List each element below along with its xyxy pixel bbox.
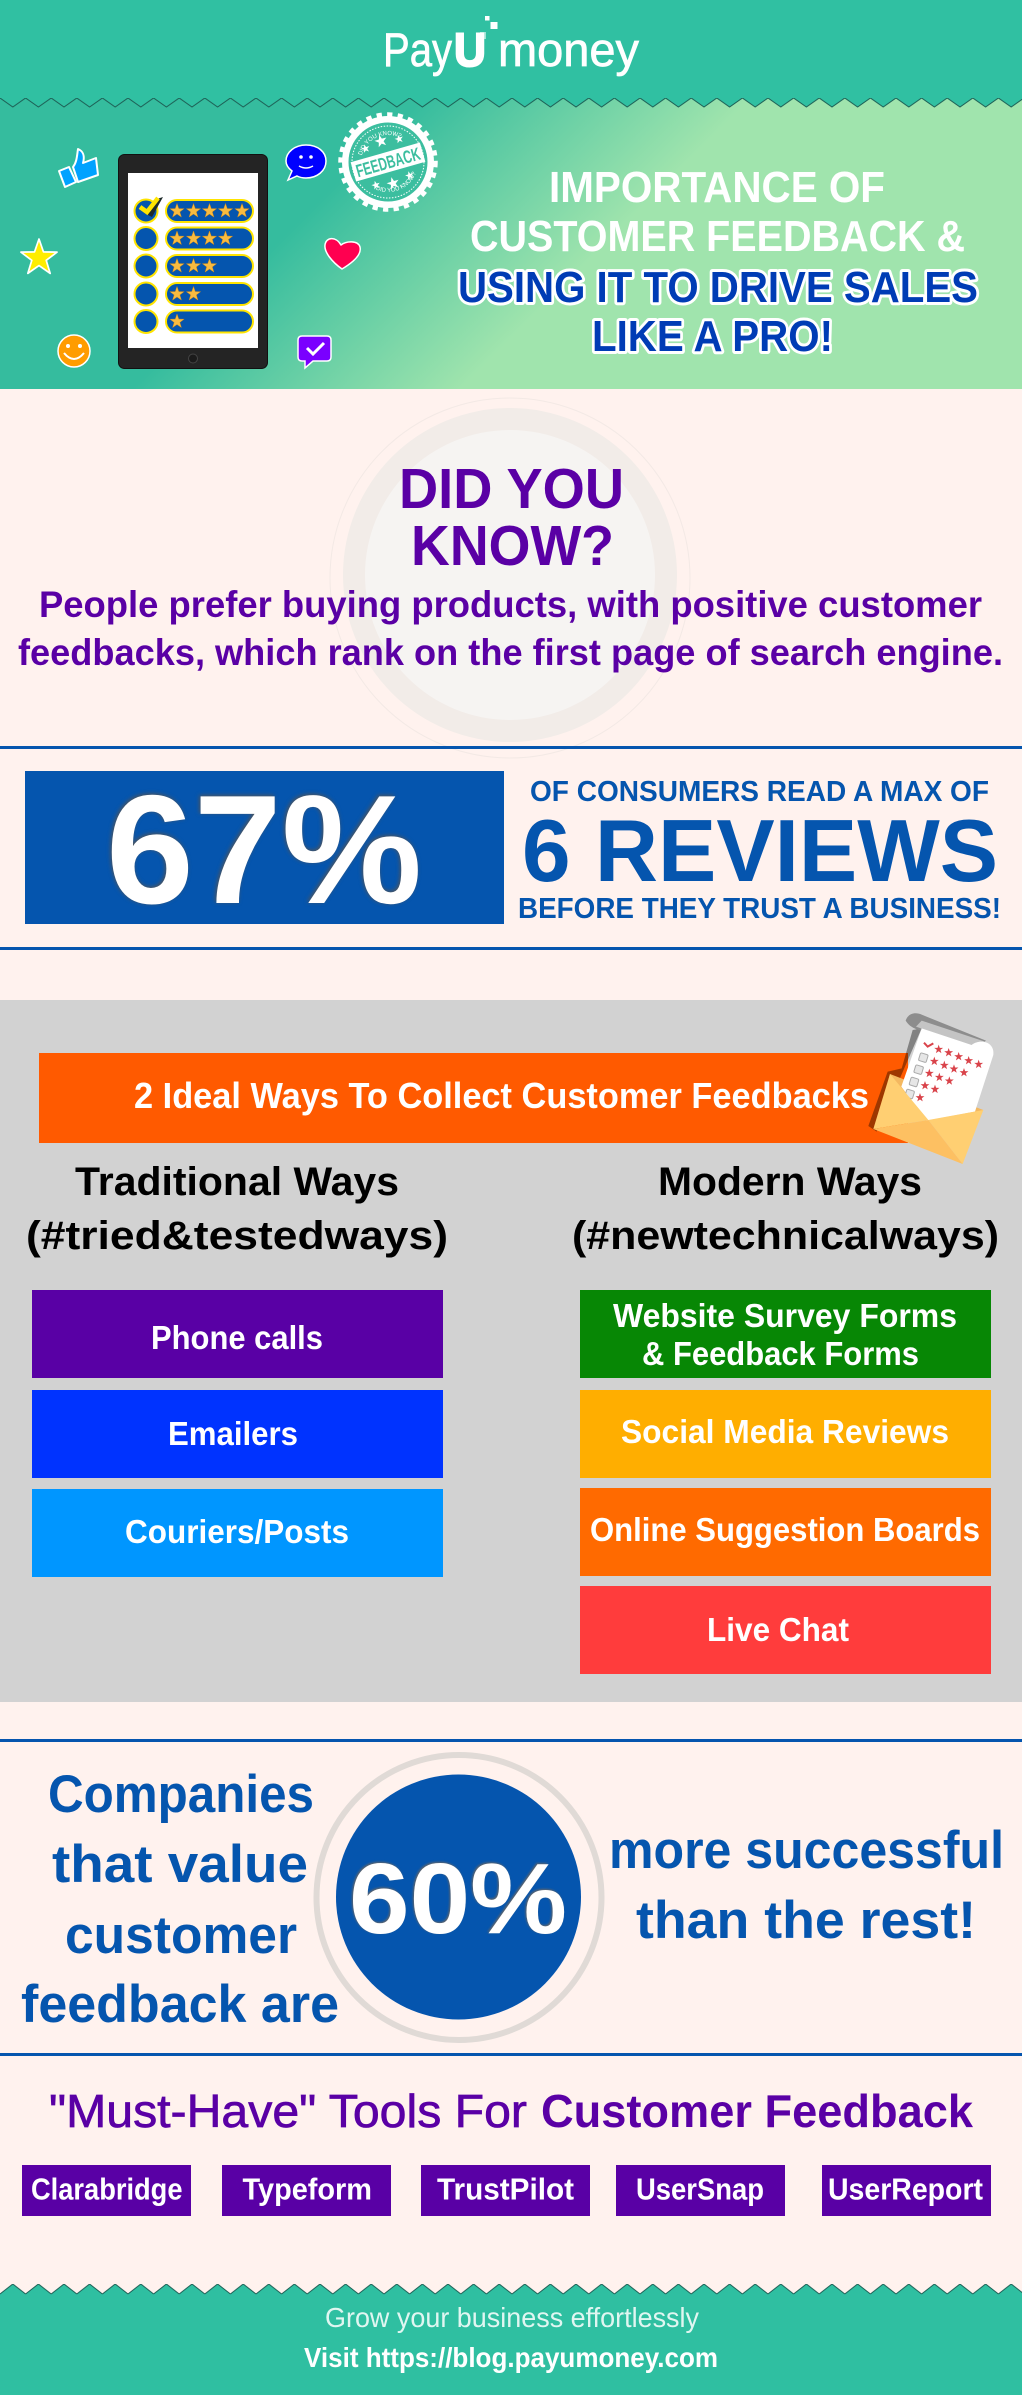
- footer: [0, 2284, 1022, 2395]
- icon: purple check bubble: [298, 336, 331, 368]
- item: phone calls: Phone calls: [151, 1319, 323, 1356]
- tool tag: trustpilot: TrustPilot: [437, 2172, 574, 2206]
- panel: did you know: [18, 398, 1003, 758]
- panel: 67 percent stat: OF CONSUMERS READ A MAX OF: [530, 776, 989, 808]
- item: emailers: [32, 1390, 443, 1478]
- icon: red heart: [325, 239, 360, 269]
- logo: PayU money: [383, 16, 639, 76]
- panel: 67 percent stat: BEFORE THEY TRUST A BUSINESS!: [518, 893, 1001, 925]
- title: CUSTOMER FEEDBACK &: [470, 212, 965, 261]
- heading: did you know: [399, 457, 624, 578]
- heading: must-have tools: "Must-Have" Tools For: [49, 2085, 527, 2137]
- tool tag: clarabridge: [22, 2165, 191, 2216]
- text: right statement: more successful: [609, 1821, 1004, 1880]
- item: website survey forms: & Feedback Forms: [642, 1335, 919, 1372]
- panel: 67 percent stat: [25, 763, 1001, 936]
- tool tag: usersnap: [616, 2165, 785, 2216]
- chart: 60 percent circle: [316, 1755, 602, 2040]
- item: emailers: Emailers: [168, 1415, 298, 1452]
- logo: PayU money: money: [498, 23, 639, 76]
- title: [458, 163, 978, 361]
- text: did you know body: People prefer buying products, with positive customer: [39, 584, 982, 625]
- text: footer url: Visit https://blog.payumoney.com: [304, 2342, 718, 2373]
- heading: must-have tools: Customer Feedback: [541, 2085, 973, 2137]
- heading: did you know: DID YOU: [399, 457, 624, 521]
- tool tag: usersnap: UserSnap: [636, 2172, 764, 2206]
- icon: feedback stamp: DID YOU KNOW?: [358, 130, 402, 155]
- hero banner: [0, 98, 1022, 389]
- item: online suggestion boards: Online Suggestion Boards: [590, 1511, 980, 1548]
- text: left statement: Companies: [48, 1765, 314, 1824]
- tool tag: userreport: UserReport: [828, 2172, 983, 2206]
- icon: thumbs up: [59, 149, 98, 187]
- item: live chat: [580, 1586, 991, 1674]
- heading: did you know: KNOW?: [411, 514, 614, 578]
- column: traditional ways: [26, 1160, 448, 1577]
- item: social media reviews: [580, 1390, 991, 1478]
- text: left statement: feedback are: [21, 1975, 339, 2034]
- panel: 67 percent stat: 6 REVIEWS: [522, 801, 998, 900]
- item: social media reviews: Social Media Reviews: [621, 1413, 949, 1450]
- column: modern ways: [572, 1160, 999, 1674]
- icon: feedback stamp: DID YOU KNOW?: [376, 172, 416, 192]
- title: USING IT TO DRIVE SALES: [458, 263, 978, 312]
- tool tag: typeform: Typeform: [242, 2172, 372, 2206]
- icon: yellow star: [21, 239, 57, 273]
- heading: modern ways: [572, 1160, 999, 1258]
- icon: orange smiley: [58, 335, 90, 367]
- item: online suggestion boards: [580, 1488, 991, 1576]
- heading banner: [39, 1053, 908, 1143]
- text: did you know body: feedbacks, which rank on the first page of search engine.: [18, 632, 1003, 673]
- logo: PayU money: U: [454, 23, 486, 76]
- heading: traditional ways: (#tried&testedways): [26, 1214, 448, 1258]
- item: couriers: Couriers/Posts: [125, 1513, 349, 1550]
- tool tag: trustpilot: [421, 2165, 590, 2216]
- text: right statement: [609, 1821, 1004, 1950]
- icon: blue smiling speech bubble: [286, 145, 326, 180]
- item: couriers: [32, 1489, 443, 1577]
- icon: feedback stamp: FEEDBACK: [354, 144, 423, 181]
- heading banner: 2 Ideal Ways To Collect Customer Feedbacks: [134, 1075, 869, 1116]
- text: left statement: [21, 1765, 339, 2034]
- tool tag: typeform: [222, 2165, 391, 2216]
- text: left statement: that value: [52, 1835, 308, 1894]
- icon: envelope with rating form: [868, 1013, 993, 1164]
- heading: traditional ways: Traditional Ways: [75, 1160, 399, 1204]
- tool tag: userreport: [822, 2165, 991, 2216]
- panel: 67 percent stat: 67%: [106, 763, 422, 936]
- heading: must-have tools: [49, 2085, 973, 2137]
- heading: traditional ways: [26, 1160, 448, 1258]
- item: website survey forms: [580, 1290, 991, 1378]
- text: did you know body: [18, 584, 1003, 673]
- title: LIKE A PRO!: [592, 312, 833, 361]
- text: right statement: than the rest!: [636, 1891, 976, 1950]
- item: live chat: Live Chat: [707, 1611, 849, 1648]
- item: website survey forms: Website Survey Forms: [613, 1297, 957, 1334]
- icon: feedback stamp: [338, 112, 438, 212]
- heading: modern ways: (#newtechnicalways): [572, 1214, 999, 1258]
- text: footer tagline: Grow your business effortlessly: [325, 2302, 699, 2333]
- panel: ways to collect feedback: [0, 1000, 1022, 1702]
- item: phone calls: [32, 1290, 443, 1378]
- heading: modern ways: Modern Ways: [658, 1160, 922, 1204]
- title: IMPORTANCE OF: [549, 163, 885, 212]
- logo: PayU money: Pay: [383, 23, 452, 76]
- panel: 60 percent stat: [21, 1755, 1004, 2040]
- chart: 60 percent circle: 60%: [349, 1843, 567, 1955]
- text: left statement: customer: [65, 1906, 297, 1965]
- tool tag: clarabridge: Clarabridge: [31, 2172, 182, 2206]
- header band with logo: [0, 0, 1022, 99]
- icon: tablet with star ratings: [118, 154, 268, 368]
